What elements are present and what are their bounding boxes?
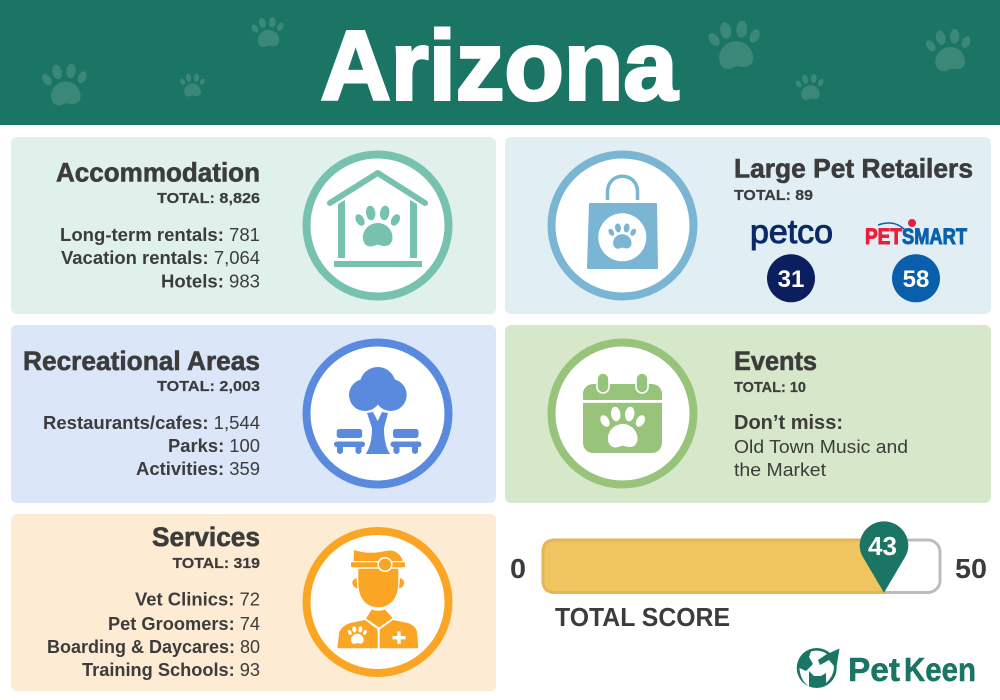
panel: recreational areas xyxy=(11,325,496,503)
icon: tree and benches xyxy=(306,342,448,484)
total score gauge xyxy=(510,521,987,632)
don't miss callout: Old Town Music and xyxy=(734,437,908,457)
background paw prints xyxy=(39,16,975,107)
label: total score: TOTAL SCORE xyxy=(555,602,730,632)
services breakdown: Boarding & Daycares: 80 xyxy=(47,637,260,657)
panel: services xyxy=(11,514,496,691)
services breakdown: Pet Groomers: 74 xyxy=(108,614,260,634)
icon: shopping bag xyxy=(552,154,694,296)
logo mark xyxy=(797,648,840,688)
logo: pet keen xyxy=(797,648,976,688)
icon: dog house xyxy=(306,154,448,296)
badge: petco count: 31 xyxy=(778,266,804,293)
heading: accommodation: Accommodation xyxy=(56,158,260,188)
recreational breakdown: Parks: 100 xyxy=(168,436,260,456)
accommodation breakdown xyxy=(60,225,260,292)
heading: events: Events xyxy=(734,346,817,376)
panel: events xyxy=(505,325,991,503)
total: retailers: TOTAL: 89 xyxy=(734,187,813,204)
logo: petco: petco xyxy=(750,213,833,250)
recreational breakdown xyxy=(43,413,260,479)
logo: petsmart xyxy=(865,219,967,249)
logo wordmark xyxy=(848,651,976,688)
don't miss callout xyxy=(734,412,908,480)
services breakdown xyxy=(47,590,260,680)
logo wordmark: Pet xyxy=(848,651,900,688)
accommodation breakdown: Long-term rentals: 781 xyxy=(60,225,260,245)
total: accommodation: TOTAL: 8,826 xyxy=(157,190,260,207)
map pin marker: 43: 43 xyxy=(868,531,897,561)
map pin marker: 43 xyxy=(860,521,908,593)
label: scale maximum: 50 xyxy=(955,553,987,584)
icon: veterinarian xyxy=(306,531,448,673)
header banner xyxy=(0,0,1000,125)
services breakdown: Training Schools: 93 xyxy=(82,660,260,680)
recreational breakdown: Activities: 359 xyxy=(136,459,260,479)
icon: calendar xyxy=(552,342,694,484)
badge: petco count xyxy=(767,254,815,302)
heading: large pet retailers: Large Pet Retailers xyxy=(734,154,973,184)
recreational breakdown: Restaurants/cafes: 1,544 xyxy=(43,413,260,433)
panel: accommodation xyxy=(11,137,496,314)
gauge fill xyxy=(543,540,884,592)
total: recreational areas: TOTAL: 2,003 xyxy=(157,378,260,395)
gauge track xyxy=(543,540,940,592)
logo: petsmart: SMART xyxy=(902,224,967,249)
services breakdown: Vet Clinics: 72 xyxy=(135,590,260,610)
heading: services: Services xyxy=(152,522,260,552)
label: scale minimum: 0 xyxy=(510,553,526,584)
total: events: TOTAL: 10 xyxy=(734,379,806,396)
total: services: TOTAL: 319 xyxy=(172,555,260,572)
accommodation breakdown: Hotels: 983 xyxy=(161,272,260,292)
logo wordmark: Keen xyxy=(904,651,976,688)
heading: recreational areas: Recreational Areas xyxy=(23,346,260,376)
logo: petsmart: PET xyxy=(865,224,902,249)
don't miss callout: Don’t miss: xyxy=(734,412,843,434)
badge: petsmart count xyxy=(892,254,940,302)
don't miss callout: the Market xyxy=(734,460,826,480)
badge: petsmart count: 58 xyxy=(903,266,929,293)
accommodation breakdown: Vacation rentals: 7,064 xyxy=(61,248,260,268)
panel: large pet retailers xyxy=(505,137,991,314)
title: Arizona xyxy=(320,10,679,120)
